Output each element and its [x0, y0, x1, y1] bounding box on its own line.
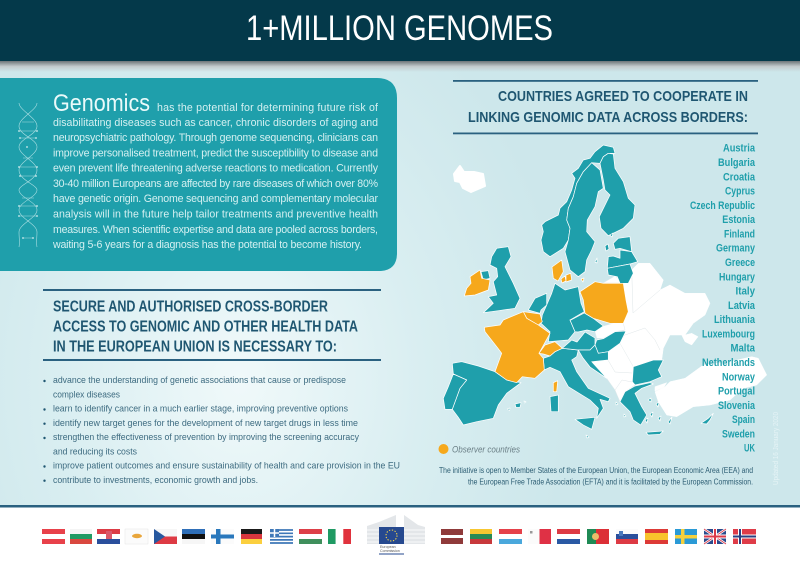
- heading: secure access: [43, 289, 381, 361]
- heading: secure access: ACCESS TO GENOMIC AND OTHER HEALTH DATA: [53, 319, 358, 336]
- heading: countries agreed: COUNTRIES AGREED TO COOPERATE IN: [498, 89, 748, 105]
- country list: [690, 143, 756, 455]
- bullet list: advance the understanding of genetic associations that cause or predispose: [53, 374, 346, 385]
- bullet list: improve patient outcomes and ensure sustainability of health and care provision in the EU: [53, 460, 400, 471]
- country list: Italy: [736, 286, 756, 298]
- country list: Cyprus: [725, 186, 755, 198]
- heading: secure access: IN THE EUROPEAN UNION IS NECESSARY TO:: [53, 339, 337, 356]
- country list: Lithuania: [714, 314, 756, 326]
- non-participating countries (white): [454, 166, 767, 417]
- European Commission logo: Commission: [380, 549, 400, 553]
- genomics paragraph: waiting 5-6 years for a diagnosis has the potential to become history.: [52, 239, 362, 251]
- title: 1+MILLION GENOMES: [246, 9, 553, 48]
- country list: Czech Republic: [690, 200, 755, 212]
- map of Europe: [443, 145, 767, 438]
- bullet list: [43, 374, 400, 485]
- genomics paragraph: has the potential for determining future risk of: [157, 102, 378, 114]
- bullet list: contribute to investments, economic growth and jobs.: [53, 474, 258, 485]
- country list: Croatia: [723, 171, 756, 183]
- genomics paragraph: even prevent life threatening adverse reactions to medication. Currently: [53, 163, 379, 175]
- header banner: [0, 0, 800, 61]
- bullet list: learn to identify cancer in a much earlier stage, improving preventive options: [53, 403, 348, 414]
- country list: UK: [744, 443, 755, 455]
- European Commission logo: [367, 515, 425, 554]
- European Commission logo: European: [380, 545, 396, 549]
- heading: countries agreed: [453, 80, 758, 134]
- flags left: [42, 529, 351, 544]
- genomics paragraph: have genetic origin. Genome sequencing and complementary molecular: [53, 193, 378, 205]
- genomics paragraph: measures. When scientific expertise and data are pooled across borders,: [53, 224, 378, 236]
- genomics paragraph: disabilitating diseases such as cancer, chronic disorders of aging and: [53, 117, 378, 129]
- country list: Germany: [716, 243, 756, 255]
- country list: Bulgaria: [718, 157, 756, 169]
- participating countries (teal): [443, 145, 713, 438]
- country list: Hungary: [719, 271, 756, 283]
- panel: genomics intro: [0, 78, 397, 271]
- icon: DNA helix: [18, 103, 38, 247]
- initiative note: [439, 465, 753, 486]
- country list: Estonia: [722, 214, 756, 226]
- country list: Slovenia: [718, 400, 756, 412]
- country list: Norway: [722, 371, 756, 383]
- heading: secure access: SECURE AND AUTHORISED CROSS-BORDER: [53, 299, 328, 316]
- genomics heading word: Genomics: [53, 90, 150, 117]
- flags right: [441, 529, 756, 544]
- legend: observer countries: Observer countries: [452, 444, 520, 455]
- country list: Portugal: [718, 386, 755, 398]
- bullet list: identify new target genes for the development of new target drugs in less time: [53, 417, 358, 428]
- country list: Finland: [724, 228, 755, 240]
- genomics paragraph: analysis will in the future help tailor treatments and preventive health: [53, 209, 378, 221]
- country list: Austria: [723, 143, 756, 155]
- bullet list: and reducing its costs: [53, 446, 137, 457]
- country list: Latvia: [728, 300, 756, 312]
- country list: Spain: [732, 414, 755, 426]
- genomics paragraph: improve personalised treatment, predict the susceptibility to disease and: [53, 148, 378, 160]
- bullet list: strengthen the effectiveness of prevention by improving the screening accuracy: [53, 431, 359, 442]
- update date note: Updated 16 January 2020: [771, 412, 780, 485]
- country list: Netherlands: [702, 357, 755, 369]
- observer countries (orange): [464, 260, 628, 392]
- genomics paragraph: neuropsychiatric pathology. Through genome sequencing, clinicians can: [53, 132, 378, 144]
- heading: countries agreed: LINKING GENOMIC DATA ACROSS BORDERS:: [468, 110, 748, 126]
- country list: Malta: [730, 343, 756, 355]
- country list: Sweden: [722, 428, 755, 440]
- bullet list: complex diseases: [53, 389, 120, 400]
- genomics paragraph: [52, 102, 379, 251]
- footer: [0, 505, 800, 565]
- country list: Greece: [725, 257, 755, 269]
- genomics paragraph: 30-40 million Europeans are affected by rare diseases of which over 80%: [53, 178, 379, 190]
- country list: Luxembourg: [702, 328, 755, 340]
